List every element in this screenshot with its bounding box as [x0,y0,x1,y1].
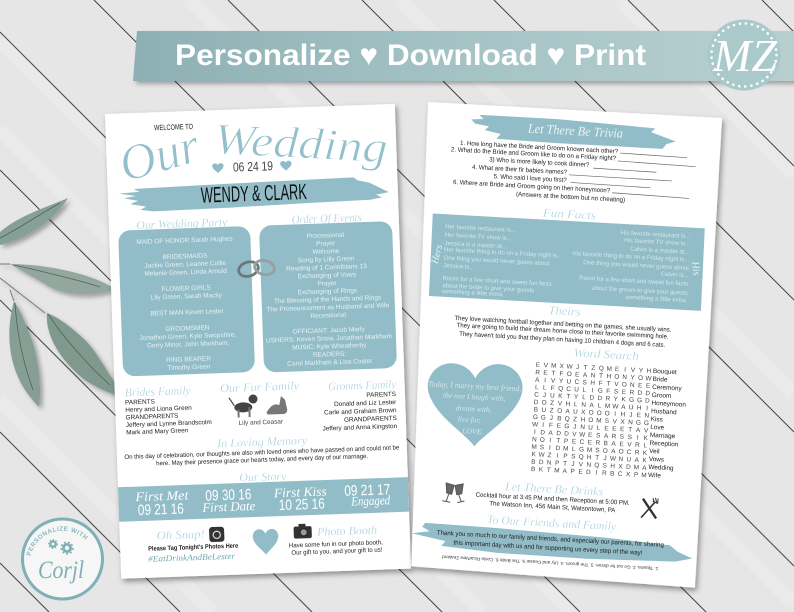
word search grid: EVMXWJTZQMEIVYH [536,362,652,375]
heading: bride's family: Brides Family [124,383,192,399]
his facts: One thing you would never guess about [583,260,689,272]
hashtag: #EatDrinkAndBeLester [148,551,236,564]
milestone: first met [134,487,190,519]
MZ logo badge: MZ [712,30,777,81]
trivia questions: (Answers at the bottom but no cheating) [516,191,625,204]
panel: order of events: Carol Markham & Lisa Coster [287,358,373,368]
word search list: Husband [651,408,677,416]
heading: word search: Word Search [573,346,639,363]
word search list [648,368,688,481]
icon: cat [266,396,287,415]
heart right of date [280,161,292,171]
heading: theirs: Theirs [548,303,581,319]
panel: wedding party: FLOWER GIRLS [161,284,211,293]
heart with vow: the one I laugh with, [443,391,506,403]
upside-down trivia answers: 1. Tijuana. 2. Go out for dinner. 3. The groom. 4. Lily and Ceasar 5. The Bride 6. Costa Rica/New Zealand [442,554,658,571]
his facts: about the groom to give your guests [592,286,688,297]
panel: order of events: The Blessing of the Hands and Rings [274,294,382,305]
word search list: Bride [652,376,668,384]
word search grid: GGJBQZHOMSVXNGG [533,414,649,427]
heart with vow [424,359,526,451]
panel: order of events: OFFICIANT: Jacob Marly [292,326,366,336]
text: bride family list: Mark and Mary Green [126,427,189,436]
top banner [133,31,794,81]
text: photo booth [289,539,383,557]
panel: order of events: Exchanging of Rings [297,287,358,296]
icon: champagne glasses [442,483,465,503]
heading: oh snap: Oh Snap! [156,527,205,542]
panel: order of events: Prayer [317,280,338,288]
heading: groom's family: Grooms Family [328,377,397,393]
word search grid: BKTMAPEDIRBCXPM [531,466,647,479]
word search list: Groom [652,392,671,400]
his facts: Calvin is a master at... [630,247,690,256]
MZ logo badge [707,20,781,90]
leaves decoration [0,198,128,407]
milestone: first kiss [273,483,328,514]
trivia brush band [470,114,677,150]
his facts: Calvin is... [661,272,689,279]
word search grid: AIVYUCSHFTVONEE [535,377,650,390]
text: theirs [454,315,672,349]
heading: trivia: Let There Be Trivia [527,120,624,141]
text: groom family list: PARENTS [366,391,396,399]
panel: wedding party [118,226,255,377]
thank-you brush band: this important day with us and for supporting us every step of the way! [453,540,643,557]
panel: order of events: READERS: [313,351,346,359]
text: photo booth: Have some fun in our photo booth, [289,539,383,550]
text: theirs: They haven't told you that they plan on having 10 children 4 dogs and 6 cats. [459,331,666,349]
milestone: engaged: 09 21 17 [344,481,391,500]
panel: wedding party: RING BEARER [166,355,211,364]
word search grid: NOITPECERBAEVRL [532,436,648,449]
milestone: first date [201,486,256,515]
heading: drinks: Let There Be Drinks [504,479,604,499]
icon: camera [293,524,312,539]
text: groom family list [321,391,398,433]
couple names: WENDY & CLARK [200,179,307,208]
his facts [570,228,691,304]
text: reception details: The Watson Inn, 456 Main St, Watsontown, PA [489,500,616,514]
panel: order of events: Welcome [312,248,340,256]
panel: order of events: The Pronouncement as Husband and Wife [266,302,390,313]
panel: wedding party: Timothy Green [167,363,211,372]
panel: order of events: Exchanging of Vows [297,271,357,280]
word search grid [530,362,653,479]
panel: wedding party: Melanie Green, Linda Arnold [144,268,227,278]
heading: friends and family: To Our Friends and Family [487,512,617,533]
panel: order of events: USHERS: Keven Snow, Jonathan Markham [266,333,392,345]
text: memorial [124,444,400,469]
word search list: Wedding [648,464,674,472]
her facts: something a little extra. [442,289,504,298]
text: bride family list: GRANDPARENTS [125,413,179,421]
text: reception details: Cocktail hour at 3:45 PM and then Reception at 5:00 PM. [476,492,630,507]
panel: wedding party: Jonathon Green, Kyle Swopshire, [139,332,237,342]
text: photo tag: Please Tag Tonight's Photos Here [148,543,239,553]
word search list: Love [650,424,665,432]
milestone: first kiss: 10 25 16 [278,496,325,514]
text: groom family list: Donald and Liz Lester [334,399,397,408]
word search list: Vows [649,456,664,464]
heading: photo booth: Photo Booth [316,523,377,539]
word search list: Honeymoon [651,400,686,409]
panel: wedding party: Lily Green, Sarah Macky [151,292,223,302]
text: groom family list: GRANDPARENTS [344,415,397,424]
word search list: Wife [648,472,661,480]
trivia questions: 1. How long have the Bride and Groom known each other? [460,140,619,155]
her facts: Her favorite thing to do on a Friday night is... [444,247,562,260]
icon: center heart [253,529,279,555]
thank-you brush band [411,522,693,565]
text: memorial: here. May their presence grace our hearts today, and every day of our marriage. [156,453,368,467]
her facts: Her favorite restaurant is... [445,224,516,234]
text: memorial: On this day of celebration, our thoughts are also with loved ones who have passed on and could not be [124,444,400,461]
date: 06 24 19 [233,158,273,175]
word search grid: LLFQCULIGFSERDD [535,384,651,397]
his facts: Room for a few short and sweet fun facts [579,276,688,288]
heading: fun facts: Fun Facts [542,205,597,222]
trivia questions: 6. Where are Bride and Groom going on their honeymoon? [453,179,611,195]
panel: order of events: Reading of 1 Corinthians 13 [286,263,367,273]
names brush band [119,176,389,213]
text: groom family list: Carle and Graham Brown [324,407,397,417]
word search grid: RETFOEANTHONYOW [535,369,653,383]
title: Our: Our [113,116,206,193]
panel: story timeline band [118,477,409,522]
panel: order of events [259,221,397,373]
gear icons [49,540,73,554]
icon: fork and knife [641,497,658,518]
text: thank you: Thank you so much to our family and friends, and especially our parents, for sharing [437,530,664,549]
label: hers: Hers [429,243,445,266]
her facts: Room for a few short and sweet fun facts [443,276,552,288]
text: bride family list: Henry and Liona Green [125,405,192,414]
word search grid: CJUKTYLDDRYKGGD [534,392,650,405]
trivia questions: 4. What are their fir babies names? [472,164,568,176]
word search grid: WIFEGJNULEEETAV [532,421,649,435]
word search grid: MSIDMLGMSOAOCRK [531,444,648,457]
trivia questions: 5. Who said I love you first? [493,173,567,184]
heading: wedding party: Our Wedding Party [136,215,228,232]
text: reception details [475,492,630,515]
panel: back sheet [406,102,722,588]
his facts: something a little extra. [626,295,688,304]
panel: order of events: Prayer [316,240,336,248]
word search grid: BUZOAUXOOOIHJEN [534,406,650,420]
heart with vow: live for, [458,414,481,425]
his facts: His favorite TV show is... [624,238,690,248]
her facts: Her favorite TV show is... [445,233,512,242]
panel: wedding party: BEST MAN Keven Lester [150,308,225,318]
banner text: Personalize ♥ Download ♥ Print [175,39,646,72]
panel: wedding party: MAID OF HONOR Sarah Hughes [136,236,234,246]
panel: wedding party: BRIDESMAIDS [163,252,208,261]
heart with vow: Today, I marry my best friend, [428,379,522,393]
word search list: Ceremony [652,384,683,393]
heart with vow: LOVE. [461,426,483,436]
text: bride family list: PARENTS [125,398,155,406]
heart with vow: dream with, [456,403,492,414]
panel: order of events: MUSIC: Kyle Wheatherby [292,342,367,352]
milestone: engaged [344,481,391,509]
panel: order of events: Song by Lilly Green [298,255,355,264]
word search grid: DOZVHLNALMWAUHI [534,399,648,412]
pet names: Lily and Ceasar [239,418,284,427]
trivia questions [449,139,628,204]
milestone: first date: 09 30 16 [205,486,252,505]
heading: order of events: Order Of Events [292,210,362,227]
trivia questions: 3) Who is more likely to cook dinner? [489,156,590,169]
milestone: first date: First Date [201,498,256,515]
icon: dog [229,394,258,418]
word search list: Veil [649,448,660,455]
title: Wedding: Wedding [213,114,389,172]
text: bride family list [125,396,212,436]
word search grid: KWZIPSQHTJWNUAK [531,451,648,464]
badge curved text: PERSONALIZE WITH [26,526,88,556]
heart left of date [212,163,224,173]
badge wordmark: Corjl [38,557,84,584]
panel: front sheet [105,104,411,579]
heading: fur family: Our Fur Family [220,378,300,395]
welcome label: WELCOME TO [154,122,193,132]
her facts: about the bride to give your guests [442,283,534,294]
trivia questions: 2. What do the Bride and Groom like to do on a Friday night? [451,146,617,162]
milestone: first met: 09 21 16 [138,500,184,519]
heading: in loving memory: In Loving Memory [216,433,308,450]
word search list: Kiss [651,416,663,424]
text: bride family list: Jeffery and Lynne Brandscolm [126,419,212,429]
text: theirs: They love watching football together and betting on the games, she usually wins. [454,315,672,334]
text: photo booth: Our gift to you, and your gift to us! [291,547,383,557]
word search grid: BDNPTJVNQSHXDMA [531,459,647,472]
her facts [442,224,564,301]
milestone: first met: First Met [134,487,189,504]
Corjl badge [21,518,104,600]
text: theirs: They are going to build their dream home close to their favorite swimming hole. [456,322,669,341]
milestone: engaged: Engaged [350,492,391,509]
panel: wedding party: Gerry Minor, John Markham, [147,340,230,350]
her facts: One thing you would never guess about [444,256,550,267]
panel: order of events: Recessional [310,312,347,320]
text: groom family list: Jeffery and Anna Kingston [323,423,398,433]
his facts: His favorite thing to do on a Friday night is... [572,251,690,264]
heading: our story: Our Story [239,469,287,485]
panel: wedding party: GROOMSMEN [165,324,210,333]
icon: instagram [209,527,224,542]
her facts: Jessica is a master at... [444,241,507,250]
her facts: Jessica is... [443,263,475,271]
his facts: His favorite restaurant is... [621,230,691,240]
milestone: first kiss: First Kiss [273,483,327,500]
label: his: His [689,260,702,276]
panel: fun facts [428,213,705,311]
word search list: Marriage [650,432,676,440]
panel: order of events: Processional [307,232,345,240]
word search grid: IDADDVWESARSSIK [534,429,649,442]
icon: wedding rings [237,258,276,279]
panel: wedding party: Jackie Green, Leanne Collie [144,260,227,270]
word search list: Bouquet [653,368,677,376]
word search list: Reception [649,440,679,448]
